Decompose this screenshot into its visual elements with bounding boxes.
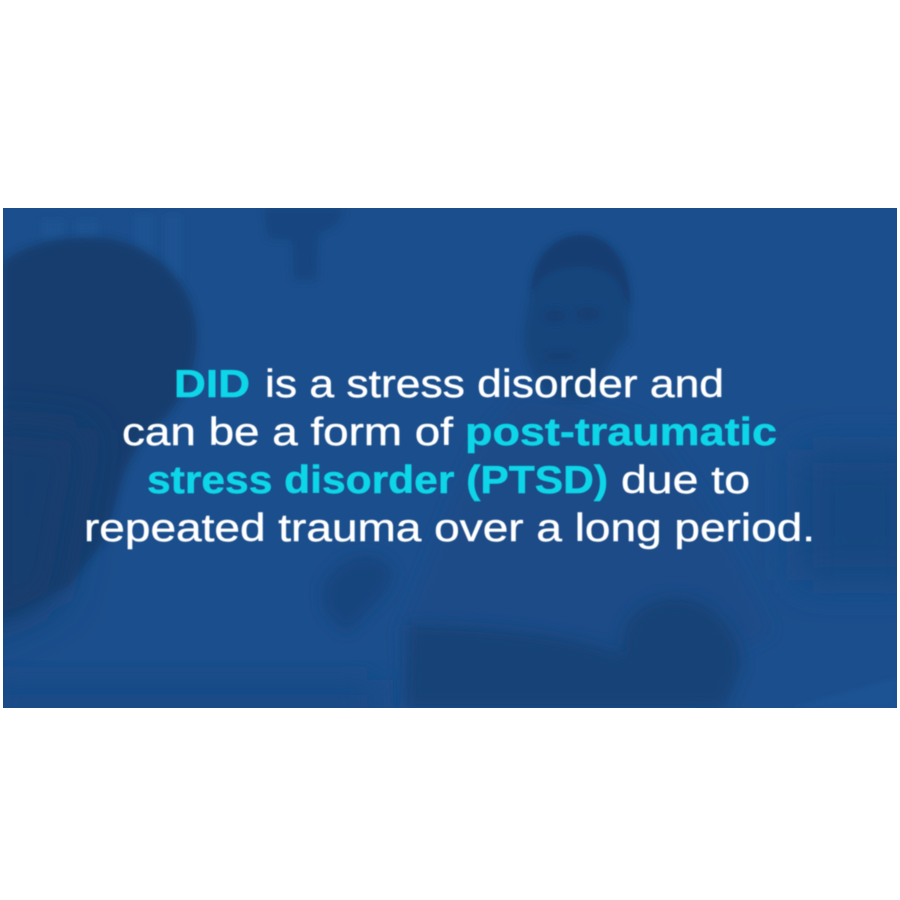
photo: man's trousers and knees bbox=[405, 597, 742, 708]
photo: man's hair bbox=[532, 234, 630, 302]
line 2: post-traumatic bbox=[465, 411, 777, 454]
photo: listener's body fade bbox=[3, 430, 70, 636]
line 3: due to bbox=[621, 459, 750, 502]
line 3: stress disorder (PTSD) bbox=[147, 459, 608, 502]
line 2: can be a form of bbox=[122, 411, 453, 454]
photo: man's face features bbox=[552, 311, 594, 317]
photo: man's head bbox=[524, 267, 629, 400]
main statement text bbox=[84, 363, 815, 550]
line 1: is a stress disorder and bbox=[265, 363, 724, 406]
line 4: repeated trauma over a long period. bbox=[84, 507, 815, 550]
line 2 bbox=[122, 411, 777, 454]
line 1: DID bbox=[174, 363, 250, 406]
photo: window bars behind the listener bbox=[42, 215, 181, 280]
photo: plant silhouette bbox=[266, 209, 340, 280]
photo: listener's arm and hand bbox=[324, 558, 390, 626]
background wall shading bbox=[0, 450, 900, 730]
panel: blue photo background bbox=[0, 208, 900, 730]
photo: listener silhouette bbox=[3, 238, 197, 620]
photo: man's torso bbox=[400, 395, 772, 708]
photo: sofa front highlight bbox=[790, 678, 897, 708]
infographic canvas bbox=[3, 208, 897, 708]
